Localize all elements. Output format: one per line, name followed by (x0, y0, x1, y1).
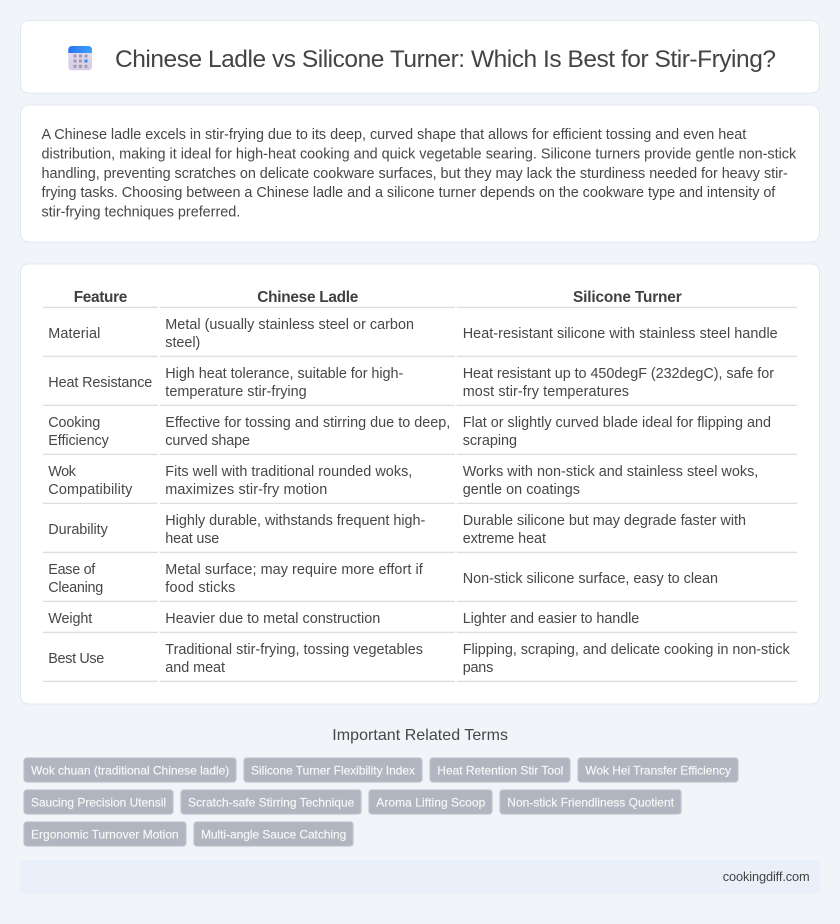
row: ease of cleaning: Cleaning (48, 580, 103, 596)
tag: Multi-angle Sauce Catching (201, 827, 346, 841)
row: ease of cleaning: Non-stick silicone surface, easy to clean (463, 571, 718, 587)
row: best use: and meat (165, 660, 225, 676)
title: Chinese Ladle vs Silicone Turner: Which Is Best for Stir-Frying? (115, 46, 776, 73)
tag (181, 790, 361, 814)
tag: Non-stick Friendliness Quotient (507, 795, 675, 809)
row: wok compatibility: maximizes stir-fry motion (165, 482, 327, 498)
row: cooking efficiency: Cooking (48, 415, 100, 431)
row: cooking efficiency: Flat or slightly curved blade ideal for flipping and (463, 415, 771, 431)
row: best use: Traditional stir-frying, tossing vegetables (165, 642, 423, 658)
row: durability: Durable silicone but may degrade faster with (463, 513, 746, 529)
row: wok compatibility: Works with non-stick and stainless steel woks, (463, 464, 758, 480)
tag: Wok Hei Transfer Efficiency (585, 763, 731, 777)
panel: title card (20, 20, 820, 93)
icon: calendar (68, 46, 92, 70)
tag: Scratch-safe Stirring Technique (188, 795, 355, 809)
row: heat resistance: temperature stir-frying (165, 384, 307, 400)
tag: Saucing Precision Utensil (31, 795, 166, 809)
heading: important related terms: Important Related Terms (332, 727, 508, 744)
row: cooking efficiency: curved shape (165, 433, 250, 449)
row: ease of cleaning: food sticks (165, 580, 235, 596)
row: heat resistance: Heat resistant up to 450degF (232degC), safe for (463, 366, 774, 382)
tag (244, 758, 422, 782)
text block: introduction paragraph: distribution, making it ideal for high-heat cooking and quick vegetable searing. Silicone turners provide gentle non-stick (42, 146, 797, 162)
row: weight: Weight (48, 611, 92, 627)
table header: Feature (74, 289, 128, 306)
row: heat resistance: High heat tolerance, suitable for high- (165, 366, 404, 382)
row: durability: Durability (48, 522, 109, 538)
tag list: related terms (24, 758, 738, 846)
tag (430, 758, 570, 782)
row: cooking efficiency: Efficiency (48, 433, 110, 449)
row: best use (48, 642, 790, 676)
row: cooking efficiency: scraping (463, 433, 517, 449)
row: material: Heat-resistant silicone with stainless steel handle (463, 326, 778, 342)
row: weight: Heavier due to metal construction (165, 611, 380, 627)
table header (74, 289, 682, 306)
row: material: Metal (usually stainless steel or carbon (165, 317, 414, 333)
row: ease of cleaning: Ease of (48, 562, 96, 578)
table header: Silicone Turner (573, 289, 682, 306)
row: wok compatibility: gentle on coatings (463, 482, 580, 498)
row: durability: Highly durable, withstands frequent high- (165, 513, 426, 529)
tag: Aroma Lifting Scoop (376, 795, 486, 809)
row: material: steel) (165, 335, 200, 351)
tag (578, 758, 738, 782)
tag: Wok chuan (traditional Chinese ladle) (31, 763, 229, 777)
row: heat resistance (48, 366, 774, 400)
row: best use: pans (463, 660, 493, 676)
footer: cookingdiff.com (723, 869, 810, 884)
table header: Chinese Ladle (257, 289, 359, 306)
text block: introduction paragraph: stir-frying techniques preferred. (42, 205, 240, 221)
row: heat resistance: most stir-fry temperatures (463, 384, 629, 400)
text block: introduction paragraph (42, 127, 797, 221)
row: weight: Lighter and easier to handle (463, 611, 639, 627)
row: cooking efficiency (48, 415, 771, 449)
row: ease of cleaning (48, 562, 718, 596)
panel: comparison table (20, 264, 820, 704)
tag (369, 790, 492, 814)
tag: Heat Retention Stir Tool (437, 763, 563, 777)
row: best use: Best Use (48, 651, 104, 667)
row: durability (48, 513, 746, 547)
row: durability: extreme heat (463, 531, 546, 547)
row: ease of cleaning: Metal surface; may require more effort if (165, 562, 424, 578)
row: material (48, 317, 778, 351)
row: wok compatibility: Compatibility (48, 482, 133, 498)
footer (20, 860, 820, 894)
text block: introduction paragraph: A Chinese ladle excels in stir-frying due to its deep, curved shape that allows for efficient tossing and even heat (42, 127, 746, 143)
row: weight (48, 611, 639, 627)
tag: Silicone Turner Flexibility Index (251, 763, 415, 777)
tag (24, 758, 236, 782)
row: wok compatibility (48, 464, 758, 498)
row: cooking efficiency: Effective for tossing and stirring due to deep, (165, 415, 450, 431)
tag (194, 822, 353, 846)
row: material: Material (48, 326, 100, 342)
row: heat resistance: Heat Resistance (48, 375, 152, 391)
tag (24, 822, 186, 846)
tag: Ergonomic Turnover Motion (31, 827, 179, 841)
tag (24, 790, 173, 814)
tag (500, 790, 681, 814)
row: wok compatibility: Fits well with traditional rounded woks, (165, 464, 412, 480)
panel: introduction (20, 105, 820, 242)
row: durability: heat use (165, 531, 219, 547)
text block: introduction paragraph: frying tasks. Choosing between a Chinese ladle and a silicone turner depends on the cookware type and intensity of (42, 185, 776, 201)
row: best use: Flipping, scraping, and delicate cooking in non-stick (463, 642, 790, 658)
row: wok compatibility: Wok (48, 464, 77, 480)
text block: introduction paragraph: handling, preventing scratches on delicate cookware surfaces, but they may lack the sturdiness needed for heavy stir- (42, 166, 788, 182)
